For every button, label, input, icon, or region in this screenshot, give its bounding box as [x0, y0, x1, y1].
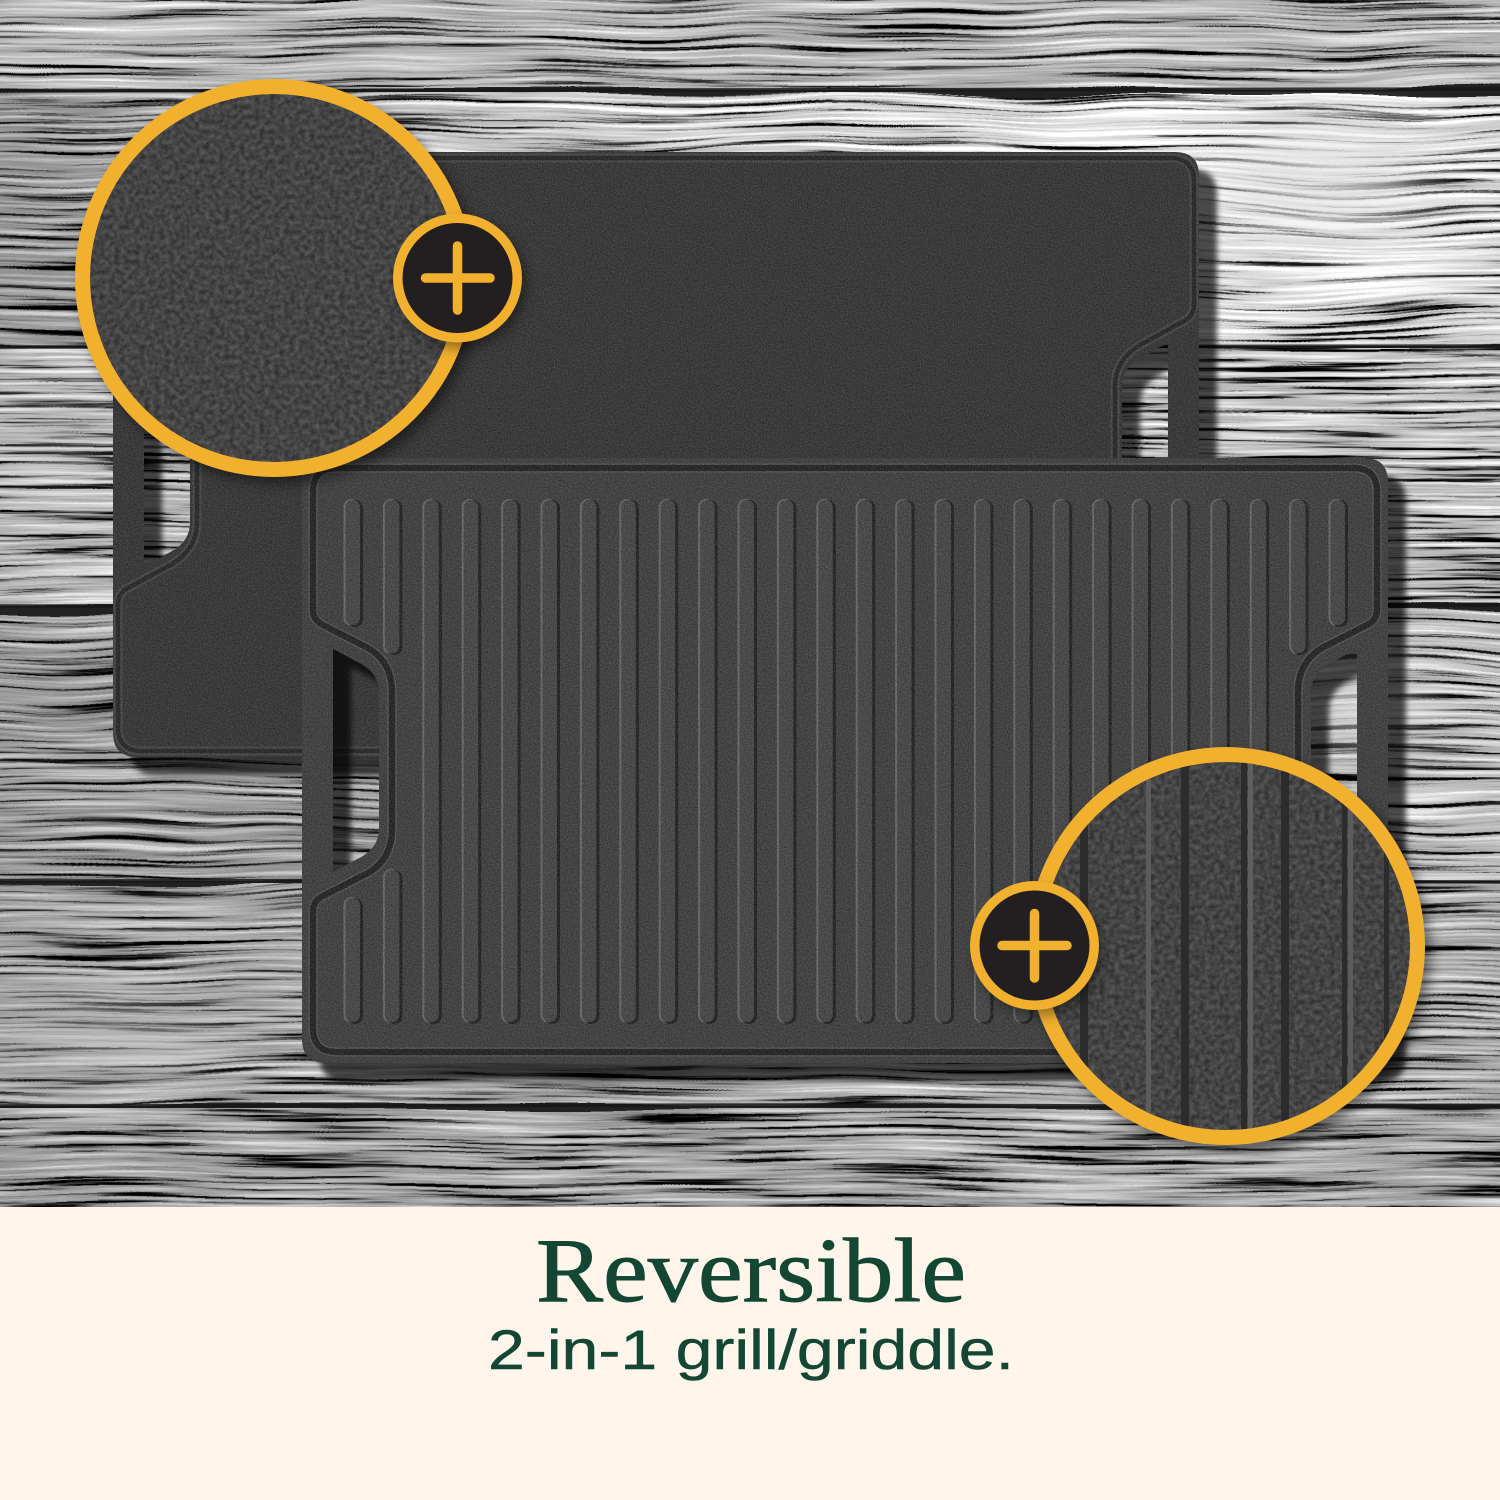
caption panel [0, 1207, 1500, 1500]
zoom callout: grill rib texture [970, 740, 1431, 1152]
zoom callout: griddle texture [75, 79, 526, 484]
griddle: back flat side [113, 152, 1217, 775]
griddle: front ribbed grill side [302, 458, 1406, 1081]
grill ribs [344, 499, 1348, 1024]
enlarged rib lines [1080, 762, 1389, 1130]
icon: plus badge [970, 881, 1104, 1016]
subheading: 2-in-1 grill/griddle. [488, 1318, 1014, 1381]
heading: Reversible [536, 1220, 966, 1321]
icon: plus badge [393, 214, 526, 348]
